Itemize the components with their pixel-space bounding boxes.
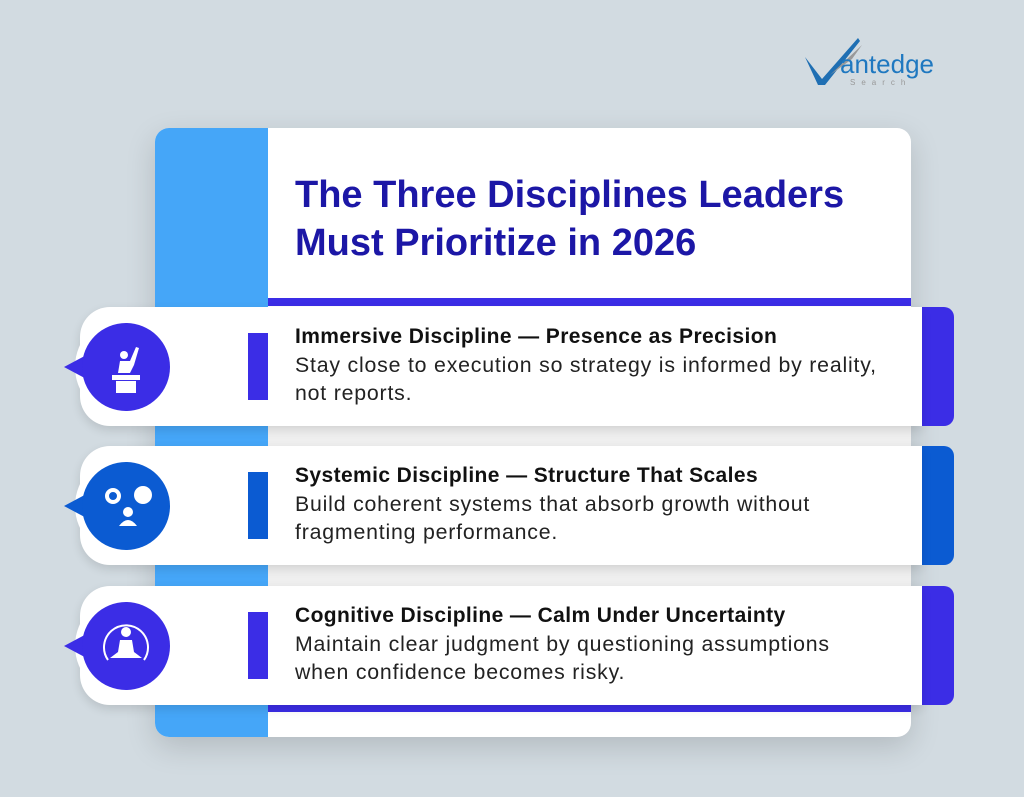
row 2: Systemic Discipline — Structure That Scales: [295, 464, 758, 487]
row 1: Stay close to execution so strategy is informed by reality,: [295, 353, 877, 377]
icon: speaker at podium: [64, 323, 170, 411]
row 1: [64, 307, 954, 433]
row 3: Cognitive Discipline — Calm Under Uncertainty: [295, 604, 786, 627]
back card: [155, 128, 911, 737]
row 1: not reports.: [295, 381, 412, 405]
bottom line: [268, 704, 911, 712]
title: Must Prioritize in 2026: [295, 222, 696, 264]
row 2: fragmenting performance.: [295, 520, 558, 544]
row 2: [64, 446, 954, 572]
title: The Three Disciplines Leaders: [295, 174, 844, 216]
row 3: when confidence becomes risky.: [295, 660, 625, 684]
row 2: Build coherent systems that absorb growth without: [295, 492, 810, 516]
icon: systems gear clock person: [64, 462, 170, 550]
title underline: [268, 298, 911, 306]
logo: [805, 38, 934, 87]
icon: meditation: [64, 602, 170, 690]
row 3: [64, 586, 954, 712]
title: [295, 174, 844, 264]
logo: Search: [850, 78, 911, 87]
row 3: Maintain clear judgment by questioning assumptions: [295, 632, 830, 656]
logo: antedge: [840, 49, 934, 79]
row 1: Immersive Discipline — Presence as Precision: [295, 325, 777, 348]
